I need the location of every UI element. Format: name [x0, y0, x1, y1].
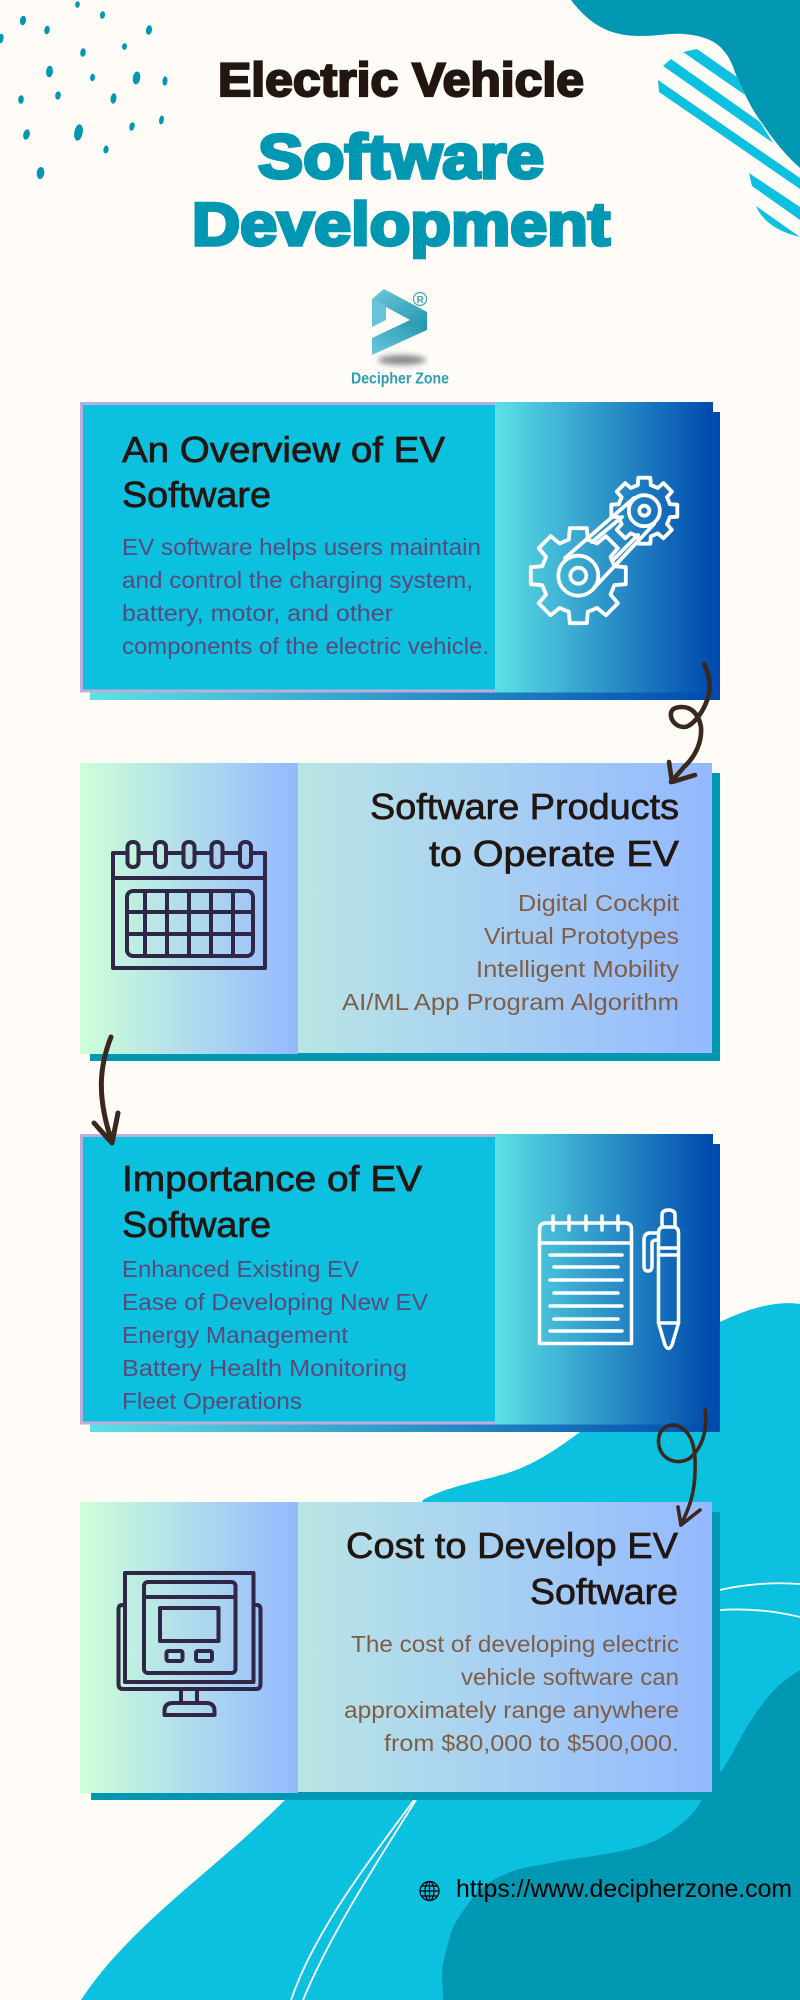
importance list: [122, 1256, 429, 1414]
cost body text: vehicle software can: [461, 1664, 679, 1690]
decorative white curves: [291, 1583, 800, 2000]
title line: Electric Vehicle: Electric Vehicle: [218, 53, 584, 106]
importance list: Ease of Developing New EV: [122, 1289, 429, 1315]
software products list: [342, 890, 680, 1015]
heading: software products: [370, 786, 679, 874]
bottom light blue blob: [81, 1303, 800, 2000]
cost body text: from $80,000 to $500,000.: [384, 1730, 679, 1756]
title line: Software: Software: [258, 123, 544, 192]
title line: Development: Development: [192, 191, 610, 258]
icon: monitor: [118, 1573, 260, 1715]
importance list: Battery Health Monitoring: [122, 1355, 407, 1381]
icon: globe: [420, 1882, 439, 1900]
top right blob: [571, 0, 800, 168]
panel: cost to develop EV software: [80, 1502, 720, 1800]
icon: notepad and pen: [540, 1210, 678, 1348]
heading: cost: Cost to Develop EV: [346, 1525, 678, 1566]
heading: importance: Importance of EV: [122, 1158, 422, 1199]
importance list: Energy Management: [122, 1322, 349, 1348]
title: [192, 53, 610, 258]
logo: Decipher Zone: [351, 289, 449, 388]
cost body text: The cost of developing electric: [351, 1631, 679, 1657]
panel: software products to operate EV: [80, 763, 720, 1061]
url text: https://www.decipherzone.com: [456, 1875, 792, 1903]
overview body text: battery, motor, and other: [122, 600, 393, 626]
website link: [420, 1875, 792, 1903]
heading: software products: Software Products: [370, 786, 679, 827]
overview body text: and control the charging system,: [122, 567, 473, 593]
overview body text: components of the electric vehicle.: [122, 633, 489, 659]
icon: calendar: [113, 842, 265, 968]
importance list: Fleet Operations: [122, 1388, 302, 1414]
cost body text: approximately range anywhere: [344, 1697, 679, 1723]
software products list: Intelligent Mobility: [476, 956, 680, 982]
arrow: overview to products: [669, 664, 710, 782]
icon: gears: [531, 478, 677, 623]
software products list: AI/ML App Program Algorithm: [342, 989, 679, 1015]
software products list: Virtual Prototypes: [484, 923, 679, 949]
arrow: products to importance: [94, 1037, 118, 1143]
logo: Decipher Zone: Decipher Zone: [351, 370, 449, 388]
decorative dots: [0, 1, 168, 179]
bottom right dark blob: [442, 1670, 800, 2000]
heading: importance: Software: [122, 1204, 271, 1245]
heading: cost: [346, 1525, 678, 1612]
top right stripes: [658, 49, 800, 237]
heading: software products: to Operate EV: [429, 833, 679, 874]
heading: cost: Software: [530, 1571, 678, 1612]
arrow: importance to cost: [659, 1409, 706, 1525]
heading: overview: Software: [122, 474, 271, 515]
software products list: Digital Cockpit: [518, 890, 680, 916]
heading: importance: [122, 1158, 422, 1245]
overview body text: [122, 534, 489, 659]
panel: overview of EV software: [82, 402, 720, 700]
cost body text: [344, 1631, 679, 1756]
logo: Decipher Zone: R: [417, 295, 425, 306]
panel: importance of EV software: [82, 1134, 720, 1432]
overview body text: EV software helps users maintain: [122, 534, 481, 560]
heading: overview: [122, 429, 445, 515]
importance list: Enhanced Existing EV: [122, 1256, 360, 1282]
heading: overview: An Overview of EV: [122, 429, 445, 470]
